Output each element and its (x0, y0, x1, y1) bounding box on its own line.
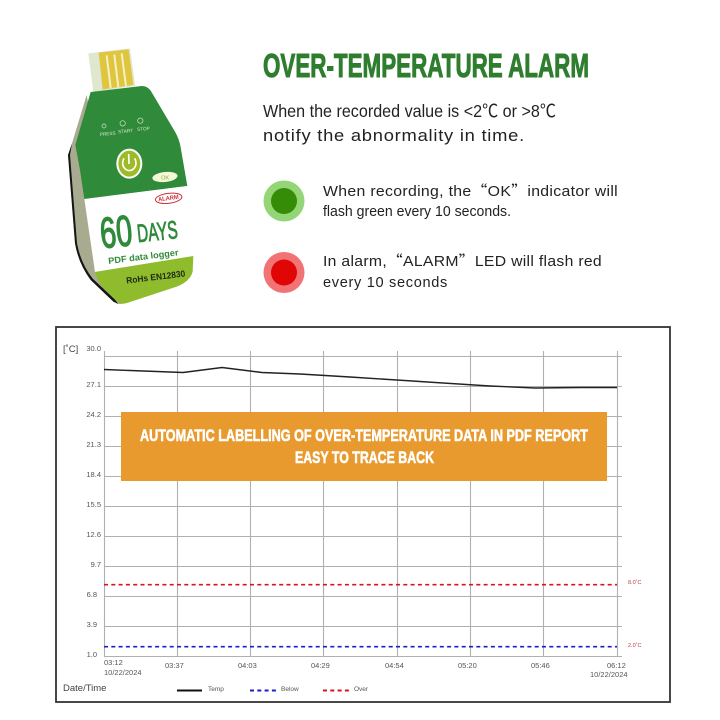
device side edge (68, 95, 130, 304)
60 DAYS text: PDF data logger (108, 247, 180, 266)
y axis labels: 6.8 (87, 590, 97, 599)
x axis labels: 06:12 (607, 661, 626, 670)
OK indicator description: flash green every 10 seconds. (323, 203, 511, 220)
legend: Over (354, 686, 369, 693)
limit labels: 2.0˚C (628, 642, 641, 649)
legend: Below (281, 686, 299, 693)
alarm indicator description (323, 250, 602, 291)
limit labels (628, 579, 641, 649)
y axis labels: 24.2 (86, 410, 101, 419)
60 DAYS text: DAYS (136, 216, 179, 248)
description text (263, 101, 556, 145)
OK indicator description (323, 180, 618, 220)
legend: Temp (208, 686, 224, 693)
limit labels: 8.0˚C (628, 579, 641, 586)
lime lower band (95, 256, 193, 304)
y axis labels (86, 344, 101, 659)
x axis labels: 04:29 (311, 661, 330, 670)
callout banner (121, 412, 607, 481)
description text: When the recorded value is <2℃ or >8℃ (263, 101, 556, 121)
x axis labels: 10/22/2024 (590, 670, 628, 679)
OK indicator description: When recording, the “OK”indicator will (323, 180, 618, 201)
icon: red LED (264, 252, 304, 293)
panel: temperature chart (56, 327, 670, 702)
ALARM badge (155, 192, 182, 205)
green upper face (75, 86, 187, 199)
y axis labels: 27.1 (86, 380, 101, 389)
x axis labels: 04:03 (238, 661, 257, 670)
RoHS text: RoHs EN12830 (126, 268, 186, 286)
x axis labels: 03:37 (165, 661, 184, 670)
button labels (100, 118, 150, 137)
x axis title: Date/Time (63, 683, 106, 694)
y axis labels: 12.6 (86, 530, 101, 539)
icon: green LED (264, 180, 304, 222)
y axis labels: 1.0 (87, 650, 97, 659)
button labels: START (118, 128, 133, 134)
y axis labels: 9.7 (91, 560, 101, 569)
alarm indicator description: every 10 seconds (323, 274, 448, 291)
ALARM badge: ALARM (158, 195, 179, 203)
USB connector (88, 48, 135, 92)
OK indicator (152, 171, 178, 183)
x axis labels (104, 658, 628, 679)
description text: notify the abnormality in time. (263, 126, 525, 145)
x axis labels: 10/22/2024 (104, 668, 142, 677)
OK indicator: OK (161, 175, 169, 181)
y axis labels: 15.5 (86, 500, 101, 509)
temperature line (104, 368, 617, 388)
y axis unit: [˚C] (63, 344, 78, 355)
y axis labels: 3.9 (87, 620, 97, 629)
alarm indicator description: In alarm,“ALARM”LED will flash red (323, 250, 602, 271)
over limit line (104, 584, 617, 586)
button labels: PRESS (100, 131, 116, 137)
chart grid (104, 351, 622, 657)
white label panel (84, 186, 193, 272)
x axis labels: 03:12 (104, 658, 123, 667)
x axis labels: 05:20 (458, 661, 477, 670)
below limit line (104, 646, 617, 648)
60 DAYS text: 60 (98, 207, 135, 258)
y axis labels: 21.3 (86, 440, 101, 449)
x axis labels: 05:46 (531, 661, 550, 670)
icon: PDF data logger device (68, 48, 193, 304)
power button (116, 149, 142, 179)
x axis labels: 04:54 (385, 661, 404, 670)
button labels: STOP (137, 126, 150, 132)
60 DAYS text (98, 207, 180, 266)
callout banner: EASY TO TRACE BACK (295, 448, 435, 467)
y axis labels: 18.4 (86, 470, 101, 479)
y axis labels: 30.0 (86, 344, 101, 353)
legend (177, 686, 369, 693)
